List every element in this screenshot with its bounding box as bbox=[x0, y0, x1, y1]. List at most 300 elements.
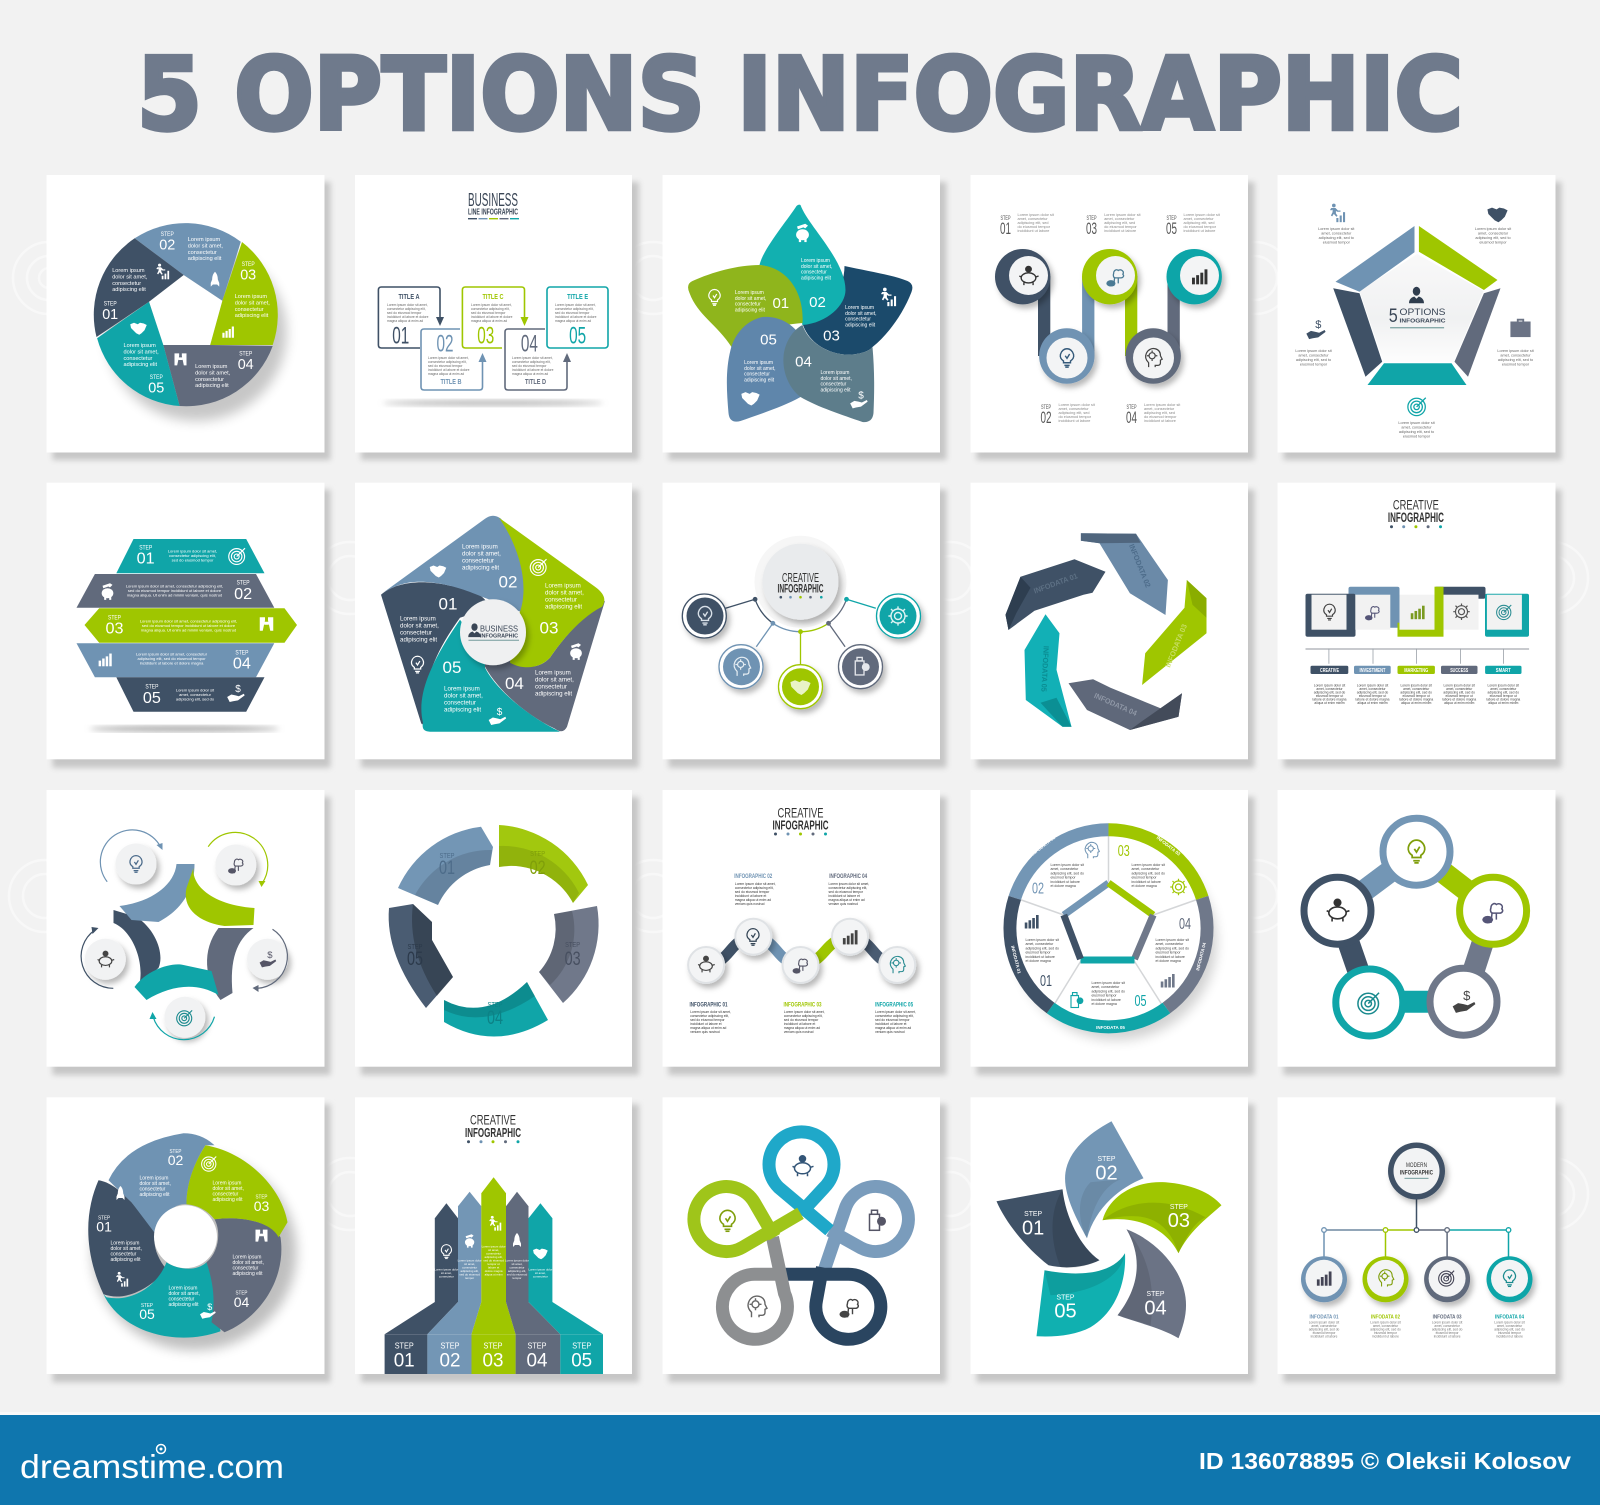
lorem blocks: et dolore magna bbox=[1092, 1002, 1117, 1006]
petal text: dolor sit amet, bbox=[735, 296, 766, 302]
box E bbox=[547, 287, 608, 350]
lorem blocks: adipiscing elit, sed do bbox=[1156, 946, 1189, 950]
segment text: Lorem ipsum bbox=[232, 1254, 261, 1260]
icon circle top left bbox=[100, 830, 162, 884]
caption 02 and 04: INFOGRAPHIC 04 bbox=[829, 873, 868, 880]
column text: aliqua ut enim minim bbox=[1488, 701, 1519, 705]
icon: people bbox=[256, 1230, 268, 1242]
box A: 01 bbox=[392, 322, 409, 350]
column text: eiusmod tempor ut bbox=[1490, 694, 1517, 698]
step labels and text: 03 bbox=[1086, 219, 1097, 238]
row 02: Lorem ipsum dolor sit amet, consectetur adipiscing elit, bbox=[126, 584, 223, 589]
lorem blocks: Lorem ipsum dolor sit bbox=[1050, 863, 1084, 867]
panel: hub with five satellites bbox=[662, 483, 946, 768]
step labels: 05 bbox=[571, 1349, 592, 1371]
side captions: Lorem ipsum dolor sit bbox=[1295, 349, 1333, 353]
segment text: adipiscing elit bbox=[212, 1197, 243, 1203]
step labels: STEP bbox=[98, 1215, 110, 1221]
row 05: adipiscing elit, sed do bbox=[176, 697, 215, 702]
panel: timeline of five circles bbox=[970, 175, 1254, 460]
satellite blue bbox=[719, 645, 763, 689]
segment grey bbox=[206, 1218, 281, 1332]
segment text: Lorem ipsum bbox=[545, 583, 581, 590]
box C: 03 bbox=[477, 322, 494, 350]
petal 02 bbox=[1065, 1121, 1144, 1238]
ribbon 02 bbox=[1081, 533, 1168, 615]
panel: chain of rings bbox=[1278, 790, 1562, 1075]
lorem blocks: adipiscing elit, sed do bbox=[1092, 989, 1125, 993]
numbers: 02 bbox=[809, 294, 826, 311]
icon: target bbox=[530, 559, 546, 575]
petal 01 bbox=[996, 1189, 1100, 1268]
row 04: 04 bbox=[233, 656, 251, 673]
step labels: 02 bbox=[168, 1152, 183, 1168]
icon: hand bbox=[489, 707, 506, 725]
hub circle: CREATIVE bbox=[782, 571, 819, 585]
petal 04 slate bbox=[783, 325, 874, 422]
hub circle: INFOGRAPHIC bbox=[778, 582, 824, 596]
lorem blocks bbox=[1018, 213, 1221, 423]
segment step 04 bbox=[163, 345, 273, 406]
column text: aliqua ut enim minim bbox=[1444, 701, 1475, 705]
icon: runner bbox=[156, 264, 169, 279]
center circle: INFOGRAPHIC bbox=[480, 634, 518, 640]
icon: head bbox=[1085, 842, 1099, 858]
satellite dark bbox=[682, 594, 726, 638]
caption 02 and 04: magna aliqua ut enim ad bbox=[828, 898, 865, 902]
lorem blocks: do eiusmod tempor bbox=[1104, 225, 1137, 229]
side captions: adipiscing elit, sed to bbox=[1319, 236, 1354, 240]
ring segment 02: STEP bbox=[530, 849, 545, 858]
ring segment 01: 01 bbox=[439, 858, 455, 879]
satellite teal bbox=[876, 594, 920, 638]
lorem blocks: incididunt ut labore bbox=[1092, 998, 1121, 1002]
segment grey bbox=[1454, 288, 1500, 377]
segment text: adipiscing elit bbox=[110, 1257, 141, 1263]
segment blue bbox=[1336, 226, 1414, 292]
connector bars bbox=[1038, 276, 1180, 356]
lorem blocks: incididunt ut labore bbox=[1184, 229, 1215, 233]
box C: sed do eiusmod tempor bbox=[471, 311, 506, 315]
lorem blocks: incididunt ut labore bbox=[1018, 229, 1049, 233]
child text: amet, consectetur bbox=[1373, 1324, 1399, 1328]
caption 02 and 04: sed do eiusmod tempor bbox=[828, 890, 864, 894]
segment dark bbox=[1333, 288, 1382, 377]
labels step 03: STEP bbox=[242, 261, 255, 268]
caption 01 03 05: consectetur adipiscing elit, bbox=[875, 1014, 914, 1018]
ring labels: INFODATA 03 bbox=[1156, 835, 1182, 857]
labels step 03: consectetur bbox=[235, 307, 264, 313]
side captions: eiusmod tempor bbox=[1403, 434, 1431, 438]
ring segment 05: STEP bbox=[408, 942, 422, 951]
child captions: INFODATA 04 bbox=[1495, 1314, 1525, 1320]
icon: gear bbox=[1170, 879, 1187, 895]
box E: TITLE E bbox=[567, 292, 588, 301]
numbers: 05 bbox=[760, 332, 777, 348]
lorem blocks: incididunt ut labore bbox=[1144, 419, 1176, 423]
box D: TITLE D bbox=[525, 377, 546, 386]
caption 01 03 05: veniam quis nostrud bbox=[784, 1030, 814, 1034]
segment text: consectetur bbox=[462, 558, 494, 565]
lorem blocks: amet, consectetur bbox=[1104, 217, 1135, 221]
panel: pentagon frame with icons bbox=[1278, 175, 1562, 460]
arrow text: sit amet, bbox=[441, 1271, 452, 1275]
heading: CREATIVE bbox=[470, 1112, 516, 1127]
lorem blocks: Lorem ipsum dolor sit bbox=[1144, 403, 1181, 407]
row 03 bbox=[84, 608, 297, 643]
step labels: 02 bbox=[440, 1349, 460, 1371]
root circle bbox=[1388, 1142, 1445, 1200]
wave connectors bbox=[706, 937, 897, 965]
caption 01 03 05: Lorem ipsum dolor sit amet, bbox=[690, 1010, 731, 1014]
labels step 03: Lorem ipsum bbox=[235, 294, 267, 300]
side captions: amet, consectetur bbox=[1500, 354, 1531, 358]
row 01: consectetur adipiscing elit, bbox=[169, 553, 216, 558]
caption 01 03 05: incididunt ut labore et bbox=[875, 1022, 907, 1026]
segment text: dolor sit amet, bbox=[232, 1260, 264, 1266]
box D: magna aliqua ut enim ad bbox=[512, 372, 548, 376]
lorem blocks: amet, consectetur bbox=[1132, 867, 1160, 871]
ring segment 02: 02 bbox=[530, 858, 546, 879]
caption 01 03 05: sed do eiusmod tempor bbox=[784, 1018, 819, 1022]
box B: 02 bbox=[436, 330, 454, 358]
lorem blocks: amet, consectetur bbox=[1092, 985, 1120, 989]
child text: eiusmod tempor bbox=[1436, 1331, 1459, 1335]
center label: OPTIONS bbox=[1400, 307, 1446, 317]
box E: incididunt ut labore et dolore bbox=[555, 315, 597, 319]
petal text: adipiscing elit bbox=[735, 307, 766, 313]
ring labels: INFODATA 05 bbox=[1096, 1025, 1125, 1030]
footer credit: ID 136078895 © Oleksii Kolosov bbox=[1199, 1448, 1571, 1474]
ribbon 05: INFODATA 05 bbox=[1039, 646, 1051, 692]
heading: LINE INFOGRAPHIC bbox=[468, 206, 518, 216]
arrow text: adipiscing elit, bbox=[461, 1269, 479, 1273]
lorem blocks: adipiscing elit, sed bbox=[1058, 411, 1090, 415]
row 04 bbox=[76, 643, 274, 677]
loop icons bbox=[720, 1156, 886, 1318]
side captions: eiusmod tempor bbox=[1323, 240, 1351, 244]
hub circle bbox=[762, 544, 838, 620]
segment step 05 bbox=[97, 302, 180, 406]
arrow text: labore et bbox=[488, 1265, 499, 1269]
caption 02 and 04: veniam quis nostrud bbox=[828, 902, 858, 906]
box C: TITLE C bbox=[482, 292, 504, 301]
loop top bbox=[769, 1132, 834, 1230]
icon: chart bbox=[222, 326, 234, 338]
segment blue bbox=[108, 1133, 214, 1235]
lorem blocks: do eiusmod tempor bbox=[1018, 225, 1051, 229]
column text: adipiscing elit, sed do bbox=[1314, 691, 1345, 695]
ribbon 04 bbox=[1068, 679, 1182, 730]
labels step 03: 03 bbox=[240, 266, 256, 284]
color bands bbox=[1306, 587, 1529, 637]
segment text bbox=[400, 544, 584, 714]
lorem blocks: do eiusmod tempor bbox=[1144, 415, 1177, 419]
labels step 01: dolor sit amet, bbox=[112, 274, 148, 280]
row 02: 02 bbox=[234, 586, 252, 603]
caption 02 and 04: consectetur adipiscing elit, bbox=[828, 886, 867, 890]
caption 02 and 04 bbox=[734, 873, 869, 906]
box B: TITLE B bbox=[440, 377, 462, 386]
side captions: amet, consectetur bbox=[1321, 232, 1352, 236]
arrow 04 bbox=[506, 1192, 560, 1374]
side captions: adipiscing elit, sed to bbox=[1475, 236, 1511, 240]
segment text: Lorem ipsum bbox=[168, 1285, 197, 1291]
petal 03: 03 bbox=[1168, 1210, 1190, 1232]
lorem blocks: Lorem ipsum dolor sit bbox=[1104, 213, 1141, 217]
lorem blocks: amet, consectetur bbox=[1050, 867, 1079, 871]
segment grey 04 bbox=[483, 601, 605, 731]
lorem blocks: et dolore magna bbox=[1156, 959, 1181, 963]
lorem blocks: amet, consectetur bbox=[1184, 217, 1214, 221]
lorem blocks: incididunt ut labore bbox=[1050, 880, 1080, 884]
arc green bbox=[186, 868, 254, 926]
lorem blocks: et dolore magna bbox=[1050, 884, 1076, 888]
petal 04: STEP bbox=[1146, 1289, 1164, 1298]
column text: amet, consectetur bbox=[1490, 687, 1517, 691]
node icons bbox=[698, 929, 905, 974]
row 04: adipiscing elit, sed do eiusmod tempor bbox=[137, 656, 206, 661]
row 05: Lorem ipsum dolor sit bbox=[176, 688, 215, 693]
side captions: eiusmod tempor bbox=[1502, 362, 1530, 366]
lorem blocks: adipiscing elit, sed do bbox=[1026, 946, 1059, 950]
row 05: amet, consectetur bbox=[179, 692, 212, 697]
panel: line infographic boxes bbox=[355, 175, 639, 460]
arc grey bbox=[207, 928, 254, 1000]
row 01: 01 bbox=[137, 551, 155, 568]
row 01 bbox=[116, 539, 264, 573]
segment text: dolor sit amet, bbox=[110, 1246, 142, 1252]
labels step 04: Lorem ipsum bbox=[195, 364, 228, 370]
child text: adipiscing elit, sed do bbox=[1370, 1327, 1401, 1331]
lorem blocks: adipiscing elit, sed bbox=[1104, 221, 1135, 225]
icon: bulb bbox=[411, 656, 424, 673]
arrow text: sed do eiusmod bbox=[459, 1272, 480, 1276]
labels step 01: STEP bbox=[104, 300, 117, 308]
caption 01 03 05: INFOGRAPHIC 01 bbox=[690, 1002, 728, 1008]
arrow text: consectetur bbox=[510, 1265, 525, 1269]
child text: adipiscing elit, sed do bbox=[1432, 1327, 1463, 1331]
lorem blocks: eiusmod tempor bbox=[1092, 994, 1117, 998]
segment teal bbox=[1368, 363, 1466, 385]
side captions: Lorem ipsum dolor sit bbox=[1475, 227, 1512, 231]
row 02: sed do eiusmod tempor incididunt ut labore et dolore bbox=[128, 588, 222, 593]
satellite grey bbox=[838, 645, 882, 689]
segment step 01 bbox=[94, 238, 184, 337]
lorem blocks: adipiscing elit, sed bbox=[1184, 221, 1215, 225]
heading: CREATIVE bbox=[1393, 498, 1439, 513]
caption 01 03 05: incididunt ut labore et bbox=[784, 1022, 815, 1026]
ring necks bbox=[1338, 852, 1493, 1002]
petal 03: STEP bbox=[1170, 1202, 1188, 1211]
arrow text: sed do eiusmod bbox=[483, 1258, 504, 1262]
caption 01 03 05: veniam quis nostrud bbox=[690, 1030, 720, 1034]
segment text: adipiscing elit bbox=[140, 1192, 170, 1198]
caption 01 03 05: Lorem ipsum dolor sit amet, bbox=[784, 1010, 825, 1014]
segment dark bbox=[88, 1180, 166, 1297]
arrow text: consectetur bbox=[462, 1265, 477, 1269]
step labels and text: 05 bbox=[1166, 219, 1177, 238]
petal 01: 01 bbox=[1022, 1217, 1044, 1239]
caption 01 03 05: magna aliqua ut enim ad bbox=[875, 1026, 911, 1030]
panel: interlaced loops bbox=[662, 1097, 946, 1382]
labels step 05: dolor sit amet, bbox=[124, 349, 159, 355]
box D: Lorem ipsum dolor sit amet, bbox=[512, 356, 553, 360]
segment text: dolor sit amet, bbox=[444, 693, 483, 700]
row 04: Lorem ipsum dolor sit amet, consectetur bbox=[136, 652, 208, 657]
root circle: INFOGRAPHIC bbox=[1400, 1170, 1434, 1176]
label pills bbox=[1310, 666, 1522, 674]
arrow text: sit amet, bbox=[464, 1262, 475, 1266]
box A: Lorem ipsum dolor sit amet, bbox=[387, 303, 428, 307]
box B: incididunt ut labore et dolore bbox=[428, 368, 470, 372]
petal 01 green bbox=[688, 265, 803, 347]
column text: labore et dolore magna bbox=[1486, 698, 1520, 702]
labels step 01 bbox=[102, 268, 148, 323]
child text: amet, consectetur bbox=[1434, 1324, 1461, 1328]
rings bbox=[1304, 818, 1527, 1036]
labels step 04: dolor sit amet, bbox=[195, 370, 231, 376]
lorem blocks: Lorem ipsum dolor sit bbox=[1184, 213, 1221, 217]
child text: Lorem ipsum dolor sit bbox=[1370, 1320, 1401, 1324]
column text: Lorem ipsum dolor sit bbox=[1357, 684, 1388, 688]
icon: handshake bbox=[741, 392, 760, 406]
row 01: Lorem ipsum dolor sit amet, bbox=[168, 549, 217, 554]
child text: incididunt ut labore bbox=[1434, 1334, 1461, 1338]
heading: INFOGRAPHIC bbox=[772, 818, 829, 832]
panel: pentagon in ring bbox=[970, 790, 1254, 1075]
side captions: Lorem ipsum dolor sit bbox=[1497, 349, 1535, 353]
petal 02: STEP bbox=[1098, 1154, 1116, 1163]
icon circle left bbox=[81, 927, 126, 988]
arrow text: sit amet, bbox=[512, 1262, 523, 1266]
child text: amet, consectetur bbox=[1497, 1324, 1523, 1328]
column text: Lorem ipsum dolor sit bbox=[1488, 684, 1519, 688]
ribbon 05 bbox=[1024, 614, 1072, 727]
row 03: Lorem ipsum dolor sit amet, consectetur adipiscing elit, bbox=[140, 619, 237, 624]
icon: target bbox=[1408, 398, 1426, 416]
segment text: consectetur bbox=[444, 700, 476, 707]
icon: handshake bbox=[130, 323, 147, 335]
child captions: INFODATA 01 bbox=[1310, 1314, 1338, 1320]
petal text: Lorem ipsum bbox=[735, 290, 764, 296]
column text: eiusmod tempor ut bbox=[1316, 694, 1343, 698]
step labels: 01 bbox=[96, 1218, 112, 1234]
icon: runner bbox=[1330, 204, 1345, 222]
child text: adipiscing elit, sed do bbox=[1309, 1327, 1339, 1331]
numbers: 01 bbox=[1040, 973, 1052, 990]
segment text: adipiscing elit bbox=[545, 604, 582, 611]
caption 02 and 04: incididunt ut labore et bbox=[828, 894, 860, 898]
heading: BUSINESS bbox=[468, 190, 518, 210]
numbers: 04 bbox=[795, 354, 812, 370]
row 04: STEP bbox=[235, 650, 248, 657]
loop bottom left bbox=[722, 1237, 787, 1339]
labels step 01: 01 bbox=[102, 306, 118, 323]
panel: icon band timeline bbox=[1278, 483, 1562, 768]
labels step 01: consectetur bbox=[112, 281, 141, 287]
numbers bbox=[1032, 843, 1191, 1010]
petal 04: 04 bbox=[1144, 1297, 1167, 1319]
column text: aliqua ut enim minim bbox=[1357, 701, 1388, 705]
lorem blocks: Lorem ipsum dolor sit bbox=[1058, 403, 1096, 407]
ribbon 01: INFODATA 01 bbox=[1032, 571, 1079, 595]
box A: magna aliqua ut enim ad bbox=[387, 319, 423, 323]
petal text: adipiscing elit bbox=[845, 322, 876, 328]
labels step 05: STEP bbox=[150, 374, 163, 381]
satellite green bbox=[778, 665, 822, 709]
child text: eiusmod tempor bbox=[1374, 1331, 1398, 1335]
segment text: consectetur bbox=[110, 1251, 137, 1257]
lorem blocks: incididunt ut labore bbox=[1058, 419, 1090, 423]
center circle: BUSINESS bbox=[480, 624, 518, 634]
child text: adipiscing elit, sed do bbox=[1494, 1327, 1525, 1331]
segment step 02 bbox=[135, 223, 241, 301]
numbers: 04 bbox=[505, 674, 524, 693]
column text: adipiscing elit, sed do bbox=[1488, 691, 1519, 695]
segment text: Lorem ipsum bbox=[400, 616, 436, 623]
petal text bbox=[735, 258, 877, 393]
numbers: 02 bbox=[499, 573, 517, 592]
box D: consectetur adipiscing elit, bbox=[512, 360, 551, 364]
labels step 02: STEP bbox=[161, 231, 174, 238]
child 01 bbox=[1301, 1256, 1347, 1302]
column text: labore et dolore magna bbox=[1442, 698, 1476, 702]
caption 02 and 04: INFOGRAPHIC 02 bbox=[734, 873, 773, 880]
column text: adipiscing elit, sed do bbox=[1443, 691, 1475, 695]
petal text: consectetur bbox=[845, 317, 871, 323]
ring segment 01 bbox=[398, 827, 493, 905]
child captions: INFODATA 02 bbox=[1371, 1314, 1400, 1320]
arrow text: tempor bbox=[512, 1276, 522, 1280]
segment text: dolor sit amet, bbox=[462, 551, 501, 558]
heading bbox=[465, 1112, 521, 1143]
petal 02: 02 bbox=[1095, 1162, 1118, 1184]
center circle bbox=[460, 599, 526, 665]
segment step 03 bbox=[210, 242, 278, 345]
arrow 02 bbox=[427, 1192, 481, 1374]
tree nodes bbox=[1322, 1228, 1511, 1232]
labels step 04: 04 bbox=[238, 356, 254, 373]
column text: amet, consectetur bbox=[1316, 687, 1343, 691]
segment text: consectetur bbox=[168, 1296, 195, 1302]
step labels and text: STEP bbox=[1041, 405, 1051, 411]
caption 01 03 05: sed do eiusmod tempor bbox=[875, 1018, 910, 1022]
labels step 05: 05 bbox=[148, 380, 164, 396]
step labels: STEP bbox=[141, 1303, 153, 1309]
caption 01 03 05: Lorem ipsum dolor sit amet, bbox=[875, 1010, 916, 1014]
icon: bulb bbox=[709, 290, 720, 305]
box C: incididunt ut labore et dolore bbox=[471, 315, 513, 319]
arrow text: Lorem ipsum dolor bbox=[482, 1244, 506, 1248]
spokes bbox=[1018, 835, 1198, 1004]
box B: magna aliqua ut enim ad bbox=[428, 372, 464, 376]
panel: swirl donut bbox=[46, 1097, 330, 1382]
icon: document bbox=[1071, 992, 1083, 1008]
column text: eiusmod tempor ut bbox=[1359, 694, 1386, 698]
box E: sed do eiusmod tempor bbox=[555, 311, 590, 315]
segment teal bbox=[104, 1262, 220, 1338]
labels step 02: adipiscing elit bbox=[188, 256, 222, 262]
lorem blocks: eiusmod tempor bbox=[1132, 876, 1157, 880]
labels step 03: dolor sit amet, bbox=[235, 300, 270, 306]
petal text: dolor sit amet, bbox=[820, 376, 852, 382]
ring labels: INFODATA 04 bbox=[1195, 942, 1207, 971]
lorem blocks: amet, consectetur bbox=[1018, 217, 1048, 221]
caption 01 03 05: INFOGRAPHIC 03 bbox=[784, 1002, 822, 1008]
petal text: Lorem ipsum bbox=[820, 370, 849, 376]
child text: eiusmod tempor bbox=[1313, 1331, 1336, 1335]
